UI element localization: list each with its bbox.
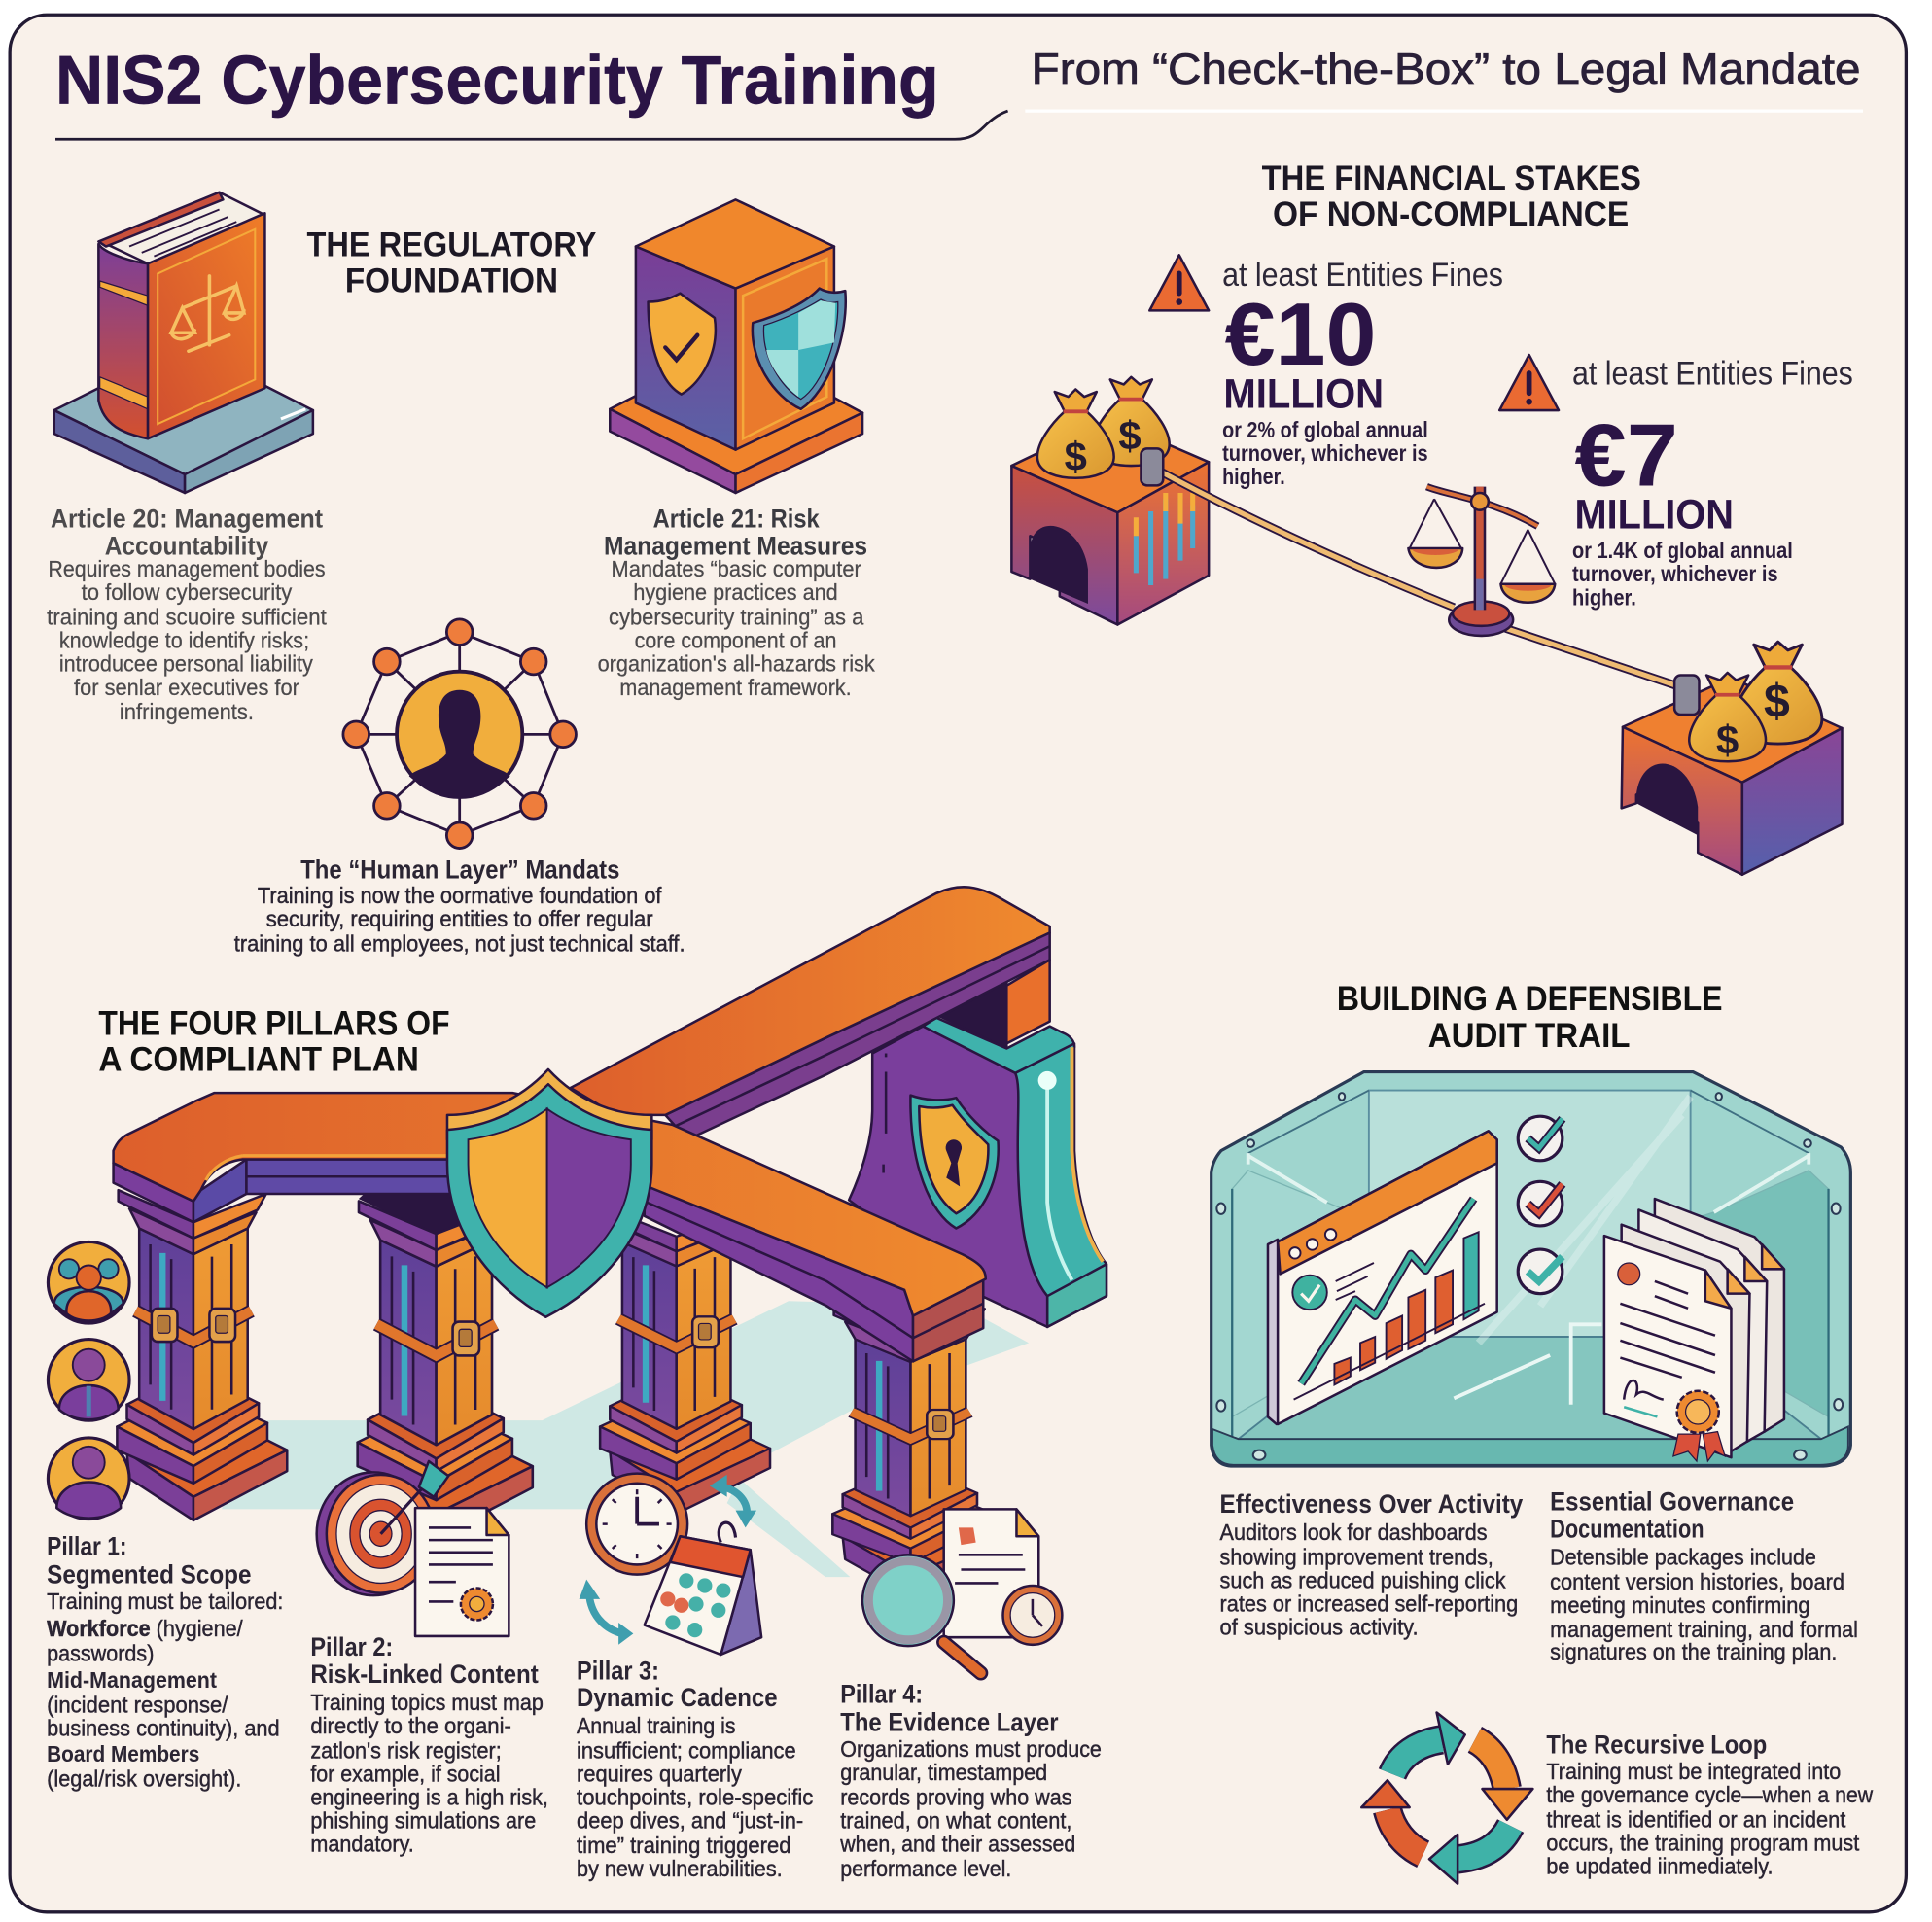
icon: refresh arrows	[589, 1485, 747, 1633]
subtitle underline	[1025, 110, 1863, 112]
text: pillar 2: engineering is a high risk,	[310, 1785, 548, 1810]
text: pillar 2: Pillar 2:	[310, 1632, 393, 1661]
main beam	[114, 1093, 986, 1361]
icon: governance documents	[1604, 1199, 1784, 1461]
icon: check marks	[1518, 1116, 1563, 1294]
heading: four pillars: THE FOUR PILLARS OF	[98, 1004, 450, 1043]
stat: 10 million fine: turnover, whichever is	[1222, 440, 1428, 466]
icon: shielded cube	[610, 199, 862, 493]
panel: regulatory foundation	[47, 192, 875, 956]
bolts	[1216, 1093, 1843, 1460]
stat: 7 million fine: higher.	[1572, 584, 1636, 610]
icon: clock and calendar	[580, 1474, 761, 1655]
text: human layer	[234, 856, 685, 956]
title underline	[55, 111, 1008, 139]
stat: 10 million fine: €10	[1225, 285, 1376, 384]
heading: audit trail	[1337, 979, 1723, 1055]
icon: board member	[48, 1438, 129, 1520]
text: pillar 4: performance level.	[840, 1856, 1011, 1881]
text: recursive loop: be updated iinmediately.	[1546, 1854, 1774, 1879]
text: effectiveness over activity	[1220, 1489, 1523, 1640]
text: effectiveness over activity: Effectiveness Over Activity	[1220, 1489, 1523, 1519]
text: article 20: introducee personal liability	[59, 651, 313, 677]
icon: money bags	[1037, 377, 1170, 479]
pillar 1 column	[117, 1190, 287, 1520]
icon: money bags	[1689, 642, 1822, 763]
icon: money bags: $	[1764, 676, 1790, 728]
text: essential governance documentation: signatures on the training plan.	[1550, 1639, 1837, 1664]
text: pillar 1: Workforce (hygiene/	[47, 1616, 243, 1641]
stat: 7 million fine	[1572, 355, 1853, 610]
title: NIS2 Cybersecurity Training	[55, 43, 939, 120]
text: recursive loop: Training must be integrated into	[1546, 1759, 1841, 1784]
text: article 21: Mandates “basic computer	[612, 556, 861, 581]
text: pillar 4: The Evidence Layer	[840, 1708, 1059, 1737]
text: effectiveness over activity: Auditors look for dashboards	[1220, 1520, 1488, 1545]
text: recursive loop: threat is identified or an incident	[1546, 1806, 1846, 1832]
header	[55, 43, 1863, 139]
dark underside of beam	[359, 1189, 474, 1239]
text: article 20: training and scuoire sufficient	[47, 605, 327, 630]
text: pillar 4: when, and their assessed	[839, 1832, 1075, 1857]
stat: 10 million fine: or 2% of global annual	[1222, 417, 1428, 442]
icon: warning triangle	[1149, 255, 1209, 310]
text: article 21: organization's all-hazards risk	[598, 651, 875, 677]
text: essential governance documentation: meeting minutes confirming	[1550, 1592, 1810, 1618]
icon: magnifier, document and clock	[862, 1509, 1062, 1673]
icon: teal shield	[753, 289, 846, 409]
text: essential governance documentation: management training, and formal	[1550, 1617, 1858, 1642]
stat: 7 million fine: MILLION	[1575, 492, 1734, 539]
text: human layer: security, requiring entities to offer regular	[266, 906, 653, 931]
text: pillar 1: Training must be tailored:	[47, 1589, 283, 1614]
icon: left money block	[1011, 377, 1209, 625]
text: pillar 3: by new vulnerabilities.	[577, 1856, 783, 1881]
text: article 21: core component of an	[635, 628, 836, 653]
icon: money bags: $	[1118, 413, 1142, 459]
stat: 10 million fine: at least Entities Fines	[1222, 257, 1503, 294]
text: pillar 3: requires quarterly	[577, 1761, 742, 1786]
icon: law book on slab	[54, 192, 313, 493]
text: pillar 2: for example, if social	[310, 1761, 500, 1786]
text: article 21: hygiene practices and	[633, 579, 838, 605]
text: pillar 4: records proving who was	[840, 1785, 1071, 1810]
icon: workforce group	[48, 1241, 129, 1323]
text: pillar 3: Dynamic Cadence	[577, 1683, 778, 1712]
text: pillar 4: Organizations must produce	[840, 1736, 1102, 1762]
text: pillar 3: Pillar 3:	[577, 1656, 659, 1685]
heading: regulatory foundation: THE REGULATORY	[307, 226, 597, 264]
text: pillar 4	[839, 1679, 1102, 1881]
panel: financial stakes	[1011, 158, 1853, 875]
stat: 7 million fine: or 1.4K of global annual	[1572, 538, 1793, 563]
text: pillar 1	[47, 1531, 283, 1792]
pillar 3 column	[600, 1206, 770, 1514]
icon: rope and scale	[1141, 448, 1682, 687]
text: pillar 1: (incident response/	[47, 1693, 228, 1718]
stat: 7 million fine: turnover, whichever is	[1572, 561, 1778, 586]
text: effectiveness over activity: such as reduced puishing click	[1220, 1568, 1506, 1593]
icon: human network	[343, 619, 576, 849]
icon: money bags: $	[1716, 717, 1739, 763]
text: article 20: to follow cybersecurity	[82, 579, 293, 605]
icon: dashboard	[1268, 1131, 1497, 1424]
text: pillar 3: Annual training is	[577, 1713, 736, 1738]
icon: money bags: $	[1065, 434, 1087, 479]
text: pillar 1: passwords)	[47, 1640, 154, 1665]
text: article 20: knowledge to identify risks;	[59, 628, 309, 653]
text: article 20: for senlar executives for	[74, 675, 299, 700]
heading: regulatory foundation	[307, 226, 597, 299]
text: pillar 2: zatlon's risk register;	[310, 1737, 502, 1763]
text: essential governance documentation: Documentation	[1550, 1515, 1704, 1544]
glass display case	[1212, 1072, 1850, 1466]
stat: 10 million fine	[1222, 257, 1503, 489]
text: pillar 3: time” training triggered	[577, 1833, 791, 1858]
text: recursive loop: occurs, the training program must	[1546, 1830, 1860, 1855]
floor shadow	[222, 1301, 1029, 1577]
text: essential governance documentation: Essential Governance	[1550, 1487, 1794, 1517]
text: pillar 1: (legal/risk oversight).	[47, 1766, 241, 1792]
text: pillar 1: Mid-Management	[47, 1667, 217, 1693]
text: pillar 2: directly to the organi-	[310, 1713, 511, 1738]
stat: 10 million fine: higher.	[1222, 464, 1285, 489]
text: pillar 4: trained, on what content,	[840, 1808, 1071, 1834]
text: pillar 2: mandatory.	[310, 1832, 414, 1857]
text: human layer: Training is now the oormative foundation of	[258, 883, 662, 908]
text: pillar 1: Segmented Scope	[47, 1559, 252, 1589]
text: article 20: Requires management bodies	[48, 556, 326, 581]
text: article 21: management framework.	[619, 675, 852, 700]
gate with keyhole shield	[849, 960, 1107, 1327]
back beam	[571, 887, 1050, 1139]
text: pillar 4: granular, timestamped	[840, 1760, 1047, 1785]
text: pillar 3	[577, 1656, 814, 1881]
text: pillar 2: phishing simulations are	[310, 1808, 536, 1834]
text: article 21: Article 21: Risk	[653, 504, 820, 533]
icon: gold shield	[649, 294, 716, 395]
subtitle: From “Check-the-Box” to Legal Mandate	[1032, 46, 1861, 93]
text: effectiveness over activity: of suspicious activity.	[1220, 1615, 1419, 1640]
heading: four pillars: A COMPLIANT PLAN	[98, 1039, 419, 1078]
text: effectiveness over activity: rates or increased self-reporting	[1220, 1591, 1518, 1617]
text: pillar 1: business continuity), and	[47, 1716, 280, 1741]
text: article 20: Article 20: Management	[51, 504, 323, 533]
text: pillar 3: insufficient; compliance	[577, 1737, 796, 1763]
text: effectiveness over activity: showing improvement trends,	[1220, 1544, 1493, 1569]
text: human layer: training to all employees, not just technical staff.	[234, 930, 685, 956]
heading: four pillars	[98, 1004, 450, 1078]
text: pillar 4: Pillar 4:	[840, 1679, 923, 1708]
panel: four pillars	[47, 887, 1107, 1881]
text: recursive loop: The Recursive Loop	[1546, 1730, 1767, 1759]
icon: target and document	[317, 1461, 509, 1636]
icon: central shield	[447, 1069, 651, 1317]
heading: audit trail: BUILDING A DEFENSIBLE	[1337, 979, 1723, 1018]
heading: financial stakes	[1262, 158, 1641, 233]
text: essential governance documentation	[1550, 1487, 1858, 1664]
text: article 21	[598, 504, 875, 700]
icon: warning triangle	[1499, 355, 1559, 410]
icon: manager	[48, 1340, 129, 1420]
text: pillar 3: touchpoints, role-specific	[577, 1785, 814, 1810]
stat: 7 million fine: at least Entities Fines	[1572, 355, 1853, 392]
text: pillar 3: deep dives, and “just-in-	[577, 1808, 803, 1834]
text: article 21: cybersecurity training” as a	[609, 605, 864, 630]
text: essential governance documentation: content version histories, board	[1550, 1569, 1844, 1594]
text: pillar 1: Pillar 1:	[47, 1531, 127, 1560]
heading: audit trail: AUDIT TRAIL	[1428, 1016, 1631, 1055]
stat: 7 million fine: €7	[1575, 405, 1678, 505]
pillar 4 column	[832, 1306, 1006, 1596]
text: recursive loop: the governance cycle—when a new	[1546, 1782, 1873, 1807]
heading: financial stakes: OF NON-COMPLIANCE	[1273, 194, 1629, 233]
icon: right money block	[1622, 642, 1842, 875]
text: recursive loop	[1546, 1730, 1873, 1879]
text: pillar 2: Risk-Linked Content	[310, 1660, 539, 1689]
text: pillar 2	[310, 1632, 548, 1857]
icon: recursive loop arrows	[1361, 1713, 1532, 1884]
text: article 21: Management Measures	[604, 531, 867, 560]
text: pillar 1: Board Members	[47, 1741, 199, 1766]
heading: financial stakes: THE FINANCIAL STAKES	[1262, 158, 1641, 197]
text: essential governance documentation: Detensible packages include	[1550, 1544, 1816, 1569]
text: article 20: Accountability	[105, 531, 268, 560]
text: pillar 2: Training topics must map	[310, 1690, 544, 1715]
text: article 20: infringements.	[120, 699, 254, 724]
text: article 20	[47, 504, 327, 724]
text: human layer: The “Human Layer” Mandats	[300, 856, 619, 885]
panel: audit trail	[1212, 979, 1873, 1884]
stat: 10 million fine: MILLION	[1223, 371, 1384, 418]
heading: regulatory foundation: FOUNDATION	[345, 261, 558, 299]
pillar 2 column	[358, 1201, 533, 1538]
icon: scales on cover	[171, 276, 244, 351]
